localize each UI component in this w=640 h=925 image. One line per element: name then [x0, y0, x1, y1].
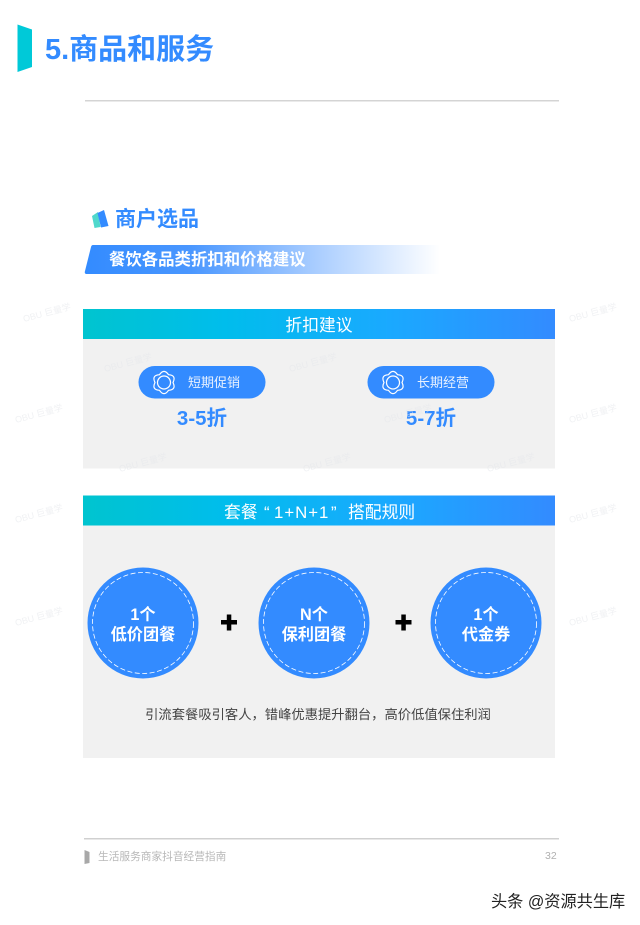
header divider	[85, 100, 559, 102]
icon: flower gear	[154, 371, 174, 394]
plus sign	[396, 614, 412, 630]
page number: 32	[545, 850, 557, 862]
page title: 5.商品和服务	[45, 33, 214, 66]
watermarks: OBU 巨量学	[14, 502, 64, 525]
icon: flower gear	[383, 371, 403, 394]
watermarks: OBU 巨量学	[14, 402, 64, 425]
section title: 商户选品	[115, 208, 199, 231]
icon: section marker	[92, 210, 108, 228]
pill: long-term operation: 长期经营	[417, 375, 469, 390]
circle: low-price group meal: 1个	[130, 606, 156, 624]
plus sign	[221, 614, 237, 630]
footer divider	[84, 838, 559, 840]
circle: voucher: 1个	[473, 606, 499, 624]
pill: short-term promotion	[138, 366, 266, 398]
footer text: 生活服务商家抖音经营指南	[98, 850, 227, 863]
watermarks: OBU 巨量学	[568, 605, 618, 628]
circle: low-price group meal	[88, 568, 198, 678]
source credit: 头条 @资源共生库	[491, 893, 625, 911]
watermarks: OBU 巨量学	[486, 451, 536, 474]
value: 3-5 discount: 3-5折	[177, 407, 227, 430]
pill: short-term promotion: 短期促销	[188, 375, 240, 390]
pill: long-term operation	[368, 366, 494, 398]
panel header: combo rule: 套餐	[224, 503, 258, 522]
watermarks: OBU 巨量学	[22, 301, 72, 324]
watermarks: OBU 巨量学	[568, 301, 618, 324]
watermarks	[14, 301, 618, 628]
panel header: discount advice: 折扣建议	[285, 316, 353, 335]
circle: profit group meal: 保利团餐	[282, 625, 346, 644]
circle: profit group meal	[258, 568, 370, 678]
banner: catering discount and price advice	[85, 245, 440, 274]
panel header: discount advice	[83, 309, 555, 339]
page header accent bar	[18, 24, 32, 72]
circle: voucher	[430, 568, 542, 678]
panel: discount advice	[83, 309, 555, 468]
panel header: combo rule: ”	[331, 503, 337, 522]
panel header: combo rule: 搭配规则	[348, 503, 415, 522]
banner: catering discount and price advice: 餐饮各品类折扣和价格建议	[109, 250, 306, 269]
footer marker	[84, 850, 90, 864]
panel header: combo rule: “	[264, 503, 270, 522]
panel header: combo rule: 1+N+1	[274, 503, 329, 522]
value: 5-7 discount: 5-7折	[406, 407, 456, 430]
caption: 引流套餐吸引客人，错峰优惠提升翻台，高价低值保住利润	[145, 706, 491, 722]
panel: 1+N+1 combo rule	[83, 496, 555, 758]
circle: voucher: 代金券	[462, 625, 510, 644]
watermarks: OBU 巨量学	[383, 402, 433, 425]
watermarks: OBU 巨量学	[568, 402, 618, 425]
watermarks: OBU 巨量学	[118, 451, 168, 474]
watermarks: OBU 巨量学	[103, 351, 153, 374]
section heading: merchant selection	[92, 208, 199, 231]
watermarks: OBU 巨量学	[302, 451, 352, 474]
watermarks: OBU 巨量学	[288, 351, 338, 374]
watermarks: OBU 巨量学	[568, 502, 618, 525]
panel header: combo rule	[83, 496, 555, 526]
circle: profit group meal: N个	[300, 606, 328, 624]
circle: low-price group meal: 低价团餐	[111, 625, 175, 644]
watermarks: OBU 巨量学	[14, 605, 64, 628]
